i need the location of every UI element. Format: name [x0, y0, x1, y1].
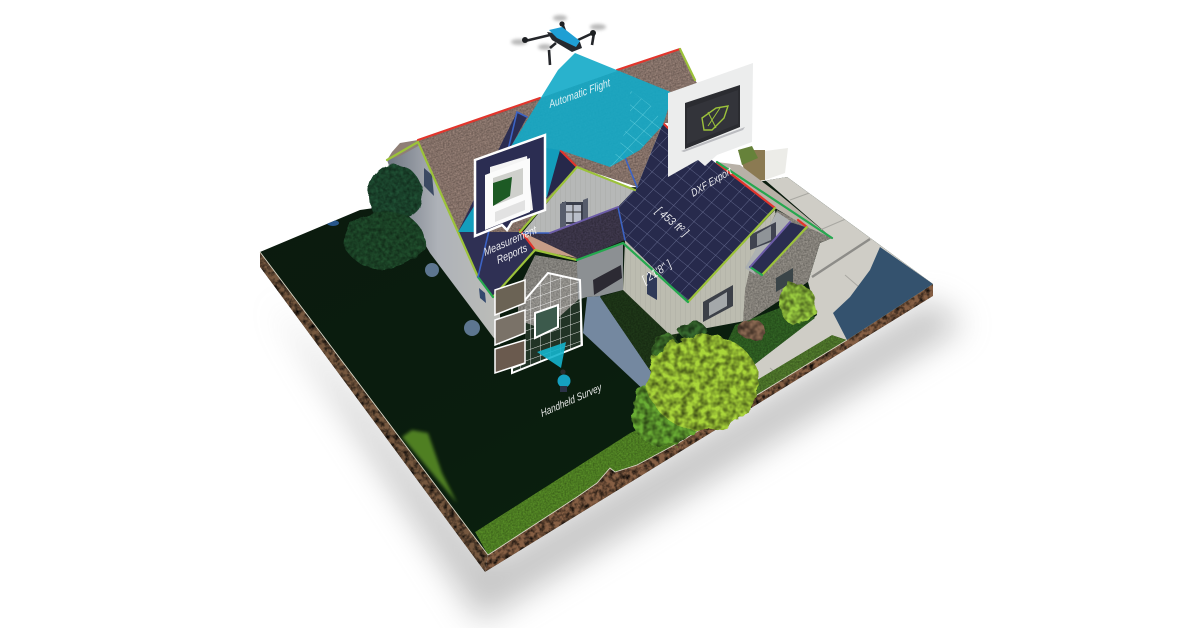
- label: roof area: [ 453 ft² ]: [652, 204, 691, 240]
- red ridge lines: [418, 49, 807, 250]
- soil: right edge: [485, 284, 933, 572]
- green eaves: [478, 162, 832, 302]
- porch gable roof: [522, 232, 577, 258]
- gable wall: right wing: [745, 212, 792, 275]
- label: Automatic Flight: Automatic Flight: [547, 77, 612, 112]
- laptop: [685, 85, 740, 149]
- house: [387, 49, 832, 345]
- brown shingle roof: [418, 49, 725, 232]
- purple ridge: [550, 207, 790, 267]
- shrub: left corner, lower lobe: [344, 211, 424, 269]
- arms: [525, 23, 594, 65]
- large front tree: crown: [647, 334, 759, 430]
- blue valleys: [478, 112, 637, 277]
- bushes beside entry: [652, 333, 678, 363]
- photo thumbnail 1: [495, 280, 525, 315]
- panel frame: [475, 135, 545, 236]
- blue body: [549, 27, 580, 47]
- sidewalk: [745, 177, 933, 385]
- yellow-green hips: [387, 49, 807, 302]
- main right wall: [623, 210, 780, 335]
- window: right wall: [703, 285, 733, 322]
- shrubs and trees: [344, 164, 816, 447]
- label: Handheld Survey: Handheld Survey: [540, 381, 604, 420]
- left side wall: [387, 142, 500, 345]
- yard behind the house: [738, 146, 765, 182]
- scan window: [535, 305, 558, 338]
- drop shadow under diorama: [272, 300, 965, 622]
- report pages: [490, 156, 533, 226]
- report table: [495, 200, 525, 222]
- lawn beside stone wing: [728, 308, 815, 364]
- window: upper right: [750, 222, 776, 250]
- stone wall: right wing: [743, 210, 832, 322]
- callout: handheld survey scan: [494, 272, 583, 374]
- callout: measurement reports: [475, 135, 545, 236]
- house scan grid: [511, 272, 583, 374]
- motor pods: [522, 37, 528, 43]
- panel: [668, 63, 753, 177]
- navy roof beside cone: [458, 112, 527, 232]
- utility units: left wall: [425, 263, 439, 277]
- callout: DXF export laptop: [668, 63, 753, 177]
- dark dormer roof: [477, 143, 577, 232]
- blue shadow on pavement: [833, 247, 933, 340]
- bush: near stone wing: [780, 284, 816, 326]
- stone wall: front porch: [518, 255, 578, 330]
- infographic: 3D house roof survey diorama: [260, 13, 968, 628]
- label: DXF Export: DXF Export: [690, 165, 735, 200]
- front gable wall: [523, 167, 635, 233]
- green drawing: [702, 106, 728, 130]
- drone underside: [547, 32, 582, 52]
- lawn and ground surface: [260, 177, 933, 555]
- center dark roof: [523, 207, 625, 260]
- shrub: left corner, upper lobe: [368, 164, 422, 226]
- sunlit grass strip: bottom: [475, 430, 680, 554]
- front lower dark roof: [458, 232, 535, 297]
- porch recess: [577, 243, 623, 300]
- window: right wall side: [647, 272, 657, 300]
- photo thumbnail 3: [495, 340, 525, 373]
- camera cone: [537, 342, 566, 368]
- window: left wall: [424, 168, 434, 196]
- report photo: [493, 168, 523, 206]
- garden strip: front right: [756, 335, 846, 394]
- pole shadow on sidewalk: [812, 239, 870, 277]
- cyan automatic flight cone: [458, 53, 673, 232]
- sunlit grass wedge: left: [402, 430, 457, 503]
- soil: left edge: [260, 252, 488, 572]
- ground slab soil edges: [260, 252, 933, 572]
- upper right roof trim: [717, 162, 832, 238]
- roof edge measurement lines: [387, 49, 832, 302]
- window: lower left wall: [479, 288, 486, 303]
- porch railing: [593, 265, 622, 295]
- main solar roof: [618, 123, 775, 302]
- rotors: [511, 39, 527, 45]
- label: eave length: [ 21'8" ]: [639, 258, 675, 287]
- thin slab edge highlight: [260, 252, 847, 555]
- drone: [511, 15, 606, 65]
- blue object behind lawn: [327, 220, 339, 226]
- window: stone wing: [776, 268, 793, 292]
- label: Measurement: Measurement: [483, 224, 539, 259]
- flower bed: [600, 290, 680, 378]
- photo thumbnail 2: [495, 310, 525, 345]
- large front tree: shaded lower lobe: [631, 383, 699, 447]
- label: Reports: Reports: [496, 242, 529, 267]
- right wing dark roof: [750, 222, 805, 275]
- surveyor person: [558, 369, 570, 392]
- front walkway: [583, 296, 651, 387]
- white shed: [765, 148, 788, 180]
- left gable roof tip: [387, 140, 420, 160]
- gable window: [560, 198, 588, 228]
- flowering shrub: [738, 321, 766, 339]
- paving joints: [770, 193, 858, 371]
